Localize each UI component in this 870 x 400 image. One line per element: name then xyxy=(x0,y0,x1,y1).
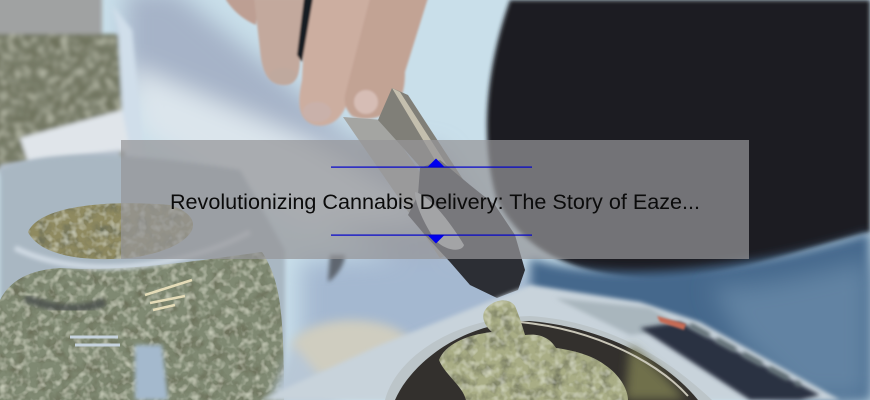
white scale and light tabletop xyxy=(260,285,840,400)
blurred grey counter band xyxy=(125,0,560,380)
upper blue divider with diamond tip xyxy=(331,158,532,168)
lower blue divider with diamond tip xyxy=(331,234,532,244)
metal tongs xyxy=(343,88,525,298)
jeans xyxy=(530,232,870,400)
cream dish on the counter xyxy=(270,320,414,400)
dark blur behind jar xyxy=(328,255,345,282)
cannabis bud on the scale xyxy=(439,300,628,400)
translucent grey title panel xyxy=(121,140,749,259)
blurred jar at top left xyxy=(0,0,145,175)
hand fingers xyxy=(226,0,428,126)
round scale pan xyxy=(385,316,712,400)
large glass jar of cannabis xyxy=(0,155,285,400)
title: Revolutionizing Cannabis Delivery: The Story of Eaze... xyxy=(170,189,700,214)
dark shirt xyxy=(487,0,870,280)
